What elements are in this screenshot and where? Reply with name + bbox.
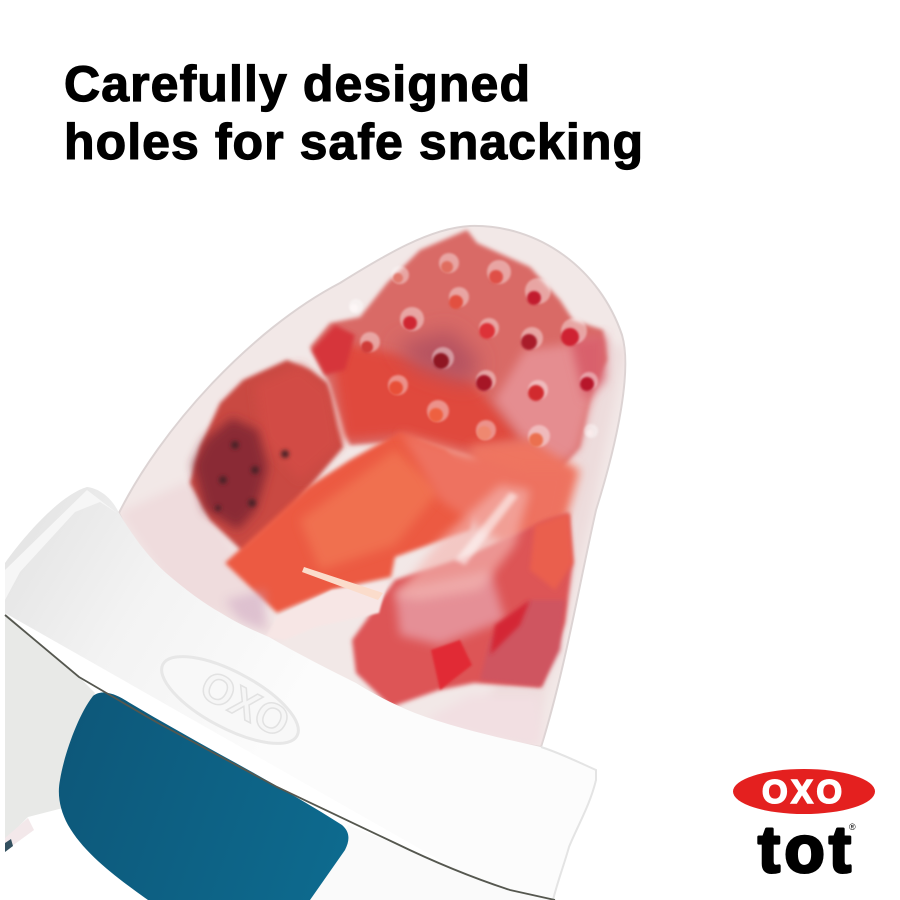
- OXO tot logo: OXO: [762, 773, 842, 810]
- strawberry: upper slice: [310, 230, 607, 473]
- hole rims: [349, 253, 598, 447]
- title: holes for safe snacking: [64, 114, 643, 170]
- handle: left grey section: [5, 613, 95, 840]
- strawberry: right slice: [470, 440, 580, 530]
- embossed OXO mark: OXO: [193, 661, 297, 746]
- hole centres: [350, 261, 594, 447]
- embossed OXO mark: [150, 640, 310, 760]
- strawberry: left chunk: [190, 360, 343, 552]
- strawberry: lower right chunk: [352, 513, 573, 707]
- logo: tot wordmark: tot: [758, 812, 851, 886]
- feeder dome with strawberries: [119, 226, 625, 747]
- strawberry: central large slice: [225, 432, 480, 613]
- OXO tot logo: [733, 769, 875, 886]
- perforation holes: [349, 253, 598, 447]
- membrane highlights: [395, 485, 530, 600]
- feeder base collar: [5, 487, 596, 900]
- logo: red oval: [733, 769, 875, 814]
- teal button: [59, 693, 348, 900]
- title: [64, 56, 643, 170]
- logo: registered mark: ®: [849, 822, 856, 832]
- collar seam: [5, 615, 555, 900]
- title: Carefully designed: [64, 56, 530, 112]
- strawberry: left chunk seeds: [215, 441, 289, 511]
- handle: lower-left edge: [5, 818, 34, 850]
- handle: right white section: [308, 825, 552, 900]
